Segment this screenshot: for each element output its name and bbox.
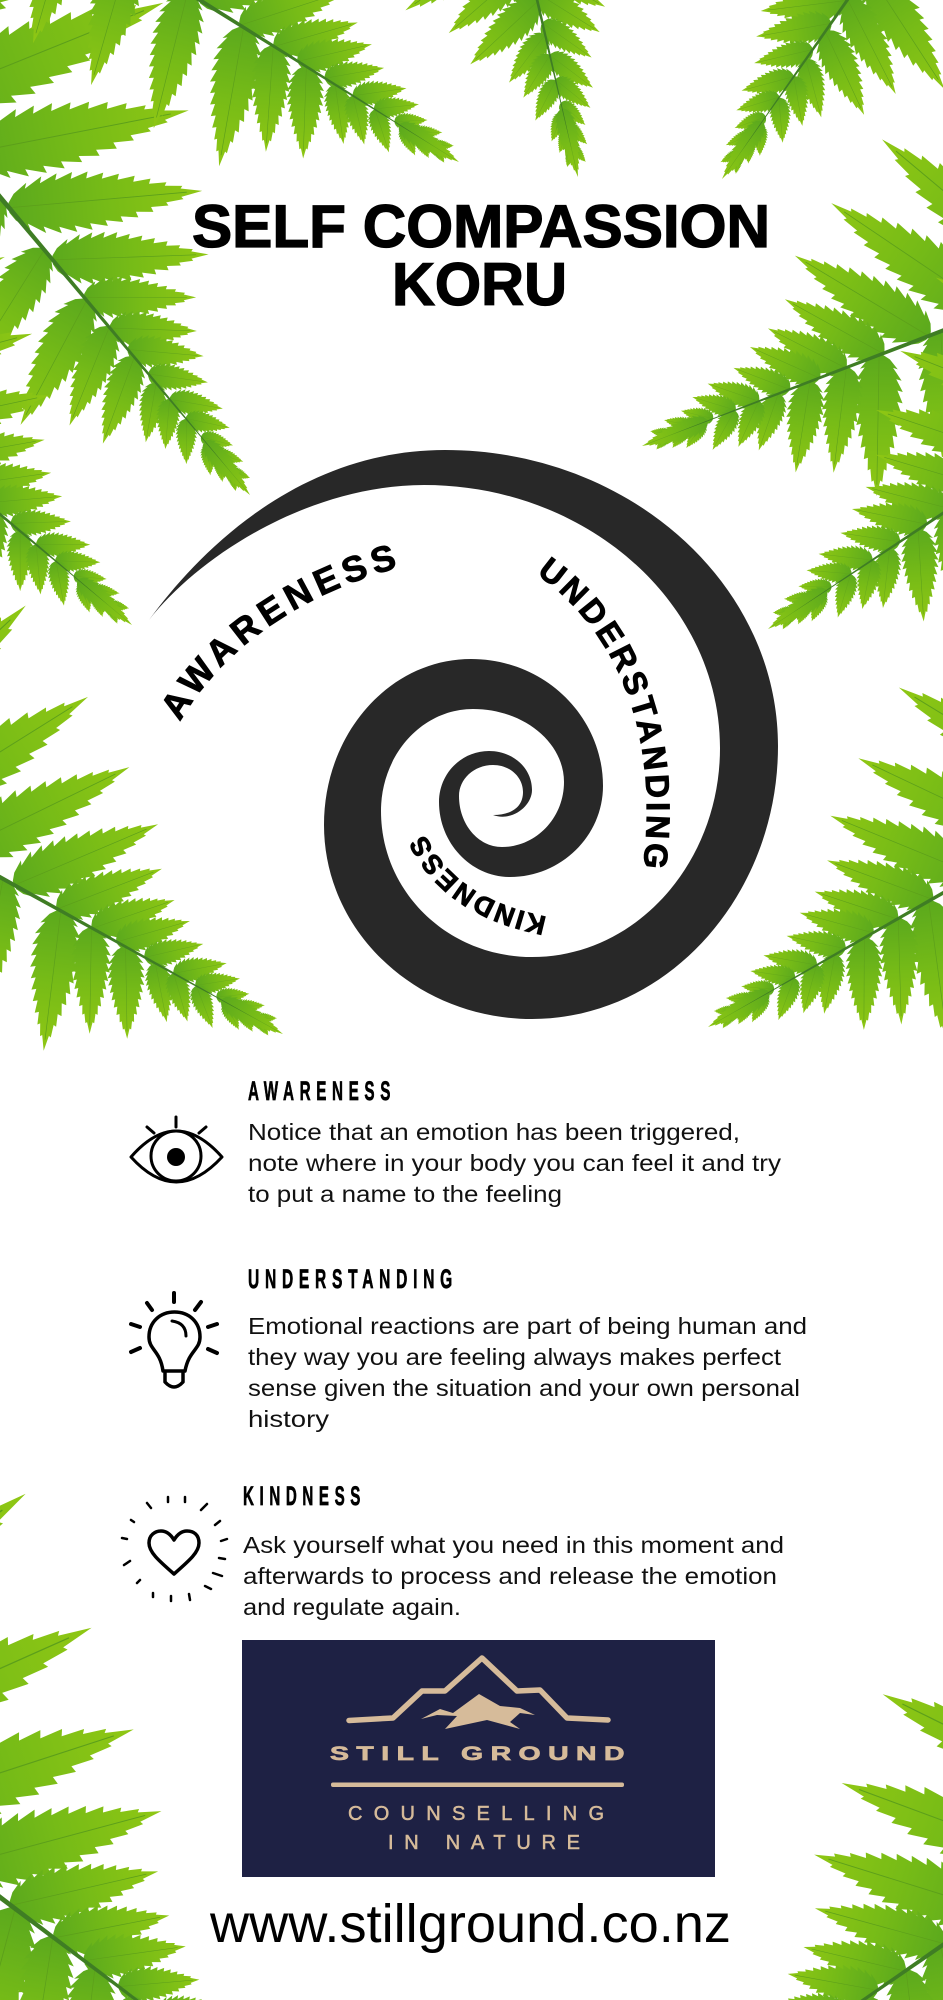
fern frond: top right [492,0,943,260]
fern frond: left lower [0,449,419,1157]
logo text: still ground: STILL GROUND [330,1744,632,1765]
logo text: in nature: IN NATURE [388,1832,592,1854]
icon: eye [131,1117,222,1182]
heading: kindness: KINDNESS [243,1481,366,1511]
icon: heart with rays [122,1497,227,1601]
logo icon: mountains [349,1658,608,1729]
logo panel: still ground [242,1640,715,1877]
title: SELF COMPASSION [192,193,770,260]
text: awareness description: Notice that an emotion has been triggered, [248,1119,740,1145]
text: kindness description [243,1532,784,1620]
fern frond: top centre [283,0,852,209]
text: kindness description: and regulate again. [243,1594,461,1620]
text: understanding description: sense given the situation and your own personal [248,1375,800,1401]
text: understanding description: they way you are feeling always makes perfect [248,1344,782,1370]
fern frond: right upper [541,0,943,577]
text: kindness description: afterwards to process and release the emotion [243,1563,777,1589]
koru label: understanding: UNDERSTANDING [540,556,670,868]
title [192,193,770,318]
koru label: kindness: KINDNESS [410,836,546,936]
fern frond: top left large [0,0,465,585]
text: understanding description: history [248,1406,329,1432]
heading: understanding: UNDERSTANDING [248,1264,458,1294]
text: awareness description [248,1119,781,1207]
icon: light bulb [131,1293,217,1387]
koru label: awareness: AWARENESS [164,546,396,722]
text: understanding description [248,1313,807,1432]
title: KORU [392,251,567,318]
section: awareness [131,1076,781,1207]
heading: awareness: AWARENESS [248,1076,396,1106]
fern frond: right lower [569,436,943,1149]
logo text: counselling: COUNSELLING [348,1803,616,1825]
section: understanding [131,1264,807,1432]
fern frond: bottom left [0,1244,517,2000]
text: awareness description: note where in your body you can feel it and try [248,1150,781,1176]
koru spiral [150,450,778,1019]
fern frond: left middle [0,0,312,733]
fern frond: right middle [613,9,943,746]
fern frond: top left inner [0,0,608,281]
fern frond: bottom right [498,1365,943,2000]
text: awareness description: to put a name to the feeling [248,1181,562,1207]
text: kindness description: Ask yourself what you need in this moment and [243,1532,784,1558]
text: understanding description: Emotional reactions are part of being human and [248,1313,807,1339]
section: kindness [122,1481,784,1620]
website url: www.stillground.co.nz [209,1894,731,1954]
